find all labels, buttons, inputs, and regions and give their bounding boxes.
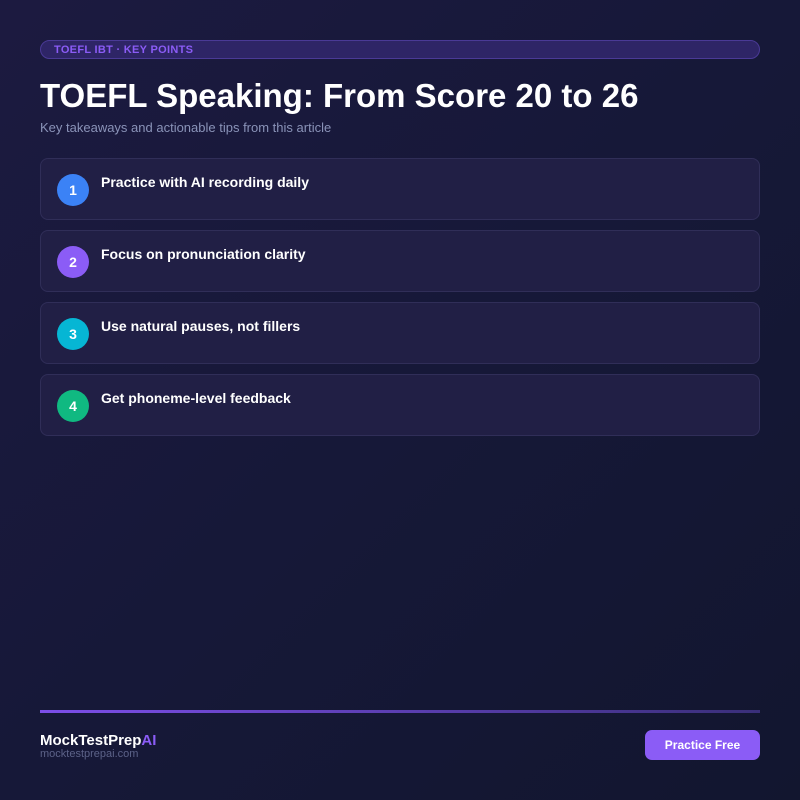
button: Practice Free [665,738,740,752]
badge: TOEFL IBT · KEY POINTS [54,44,193,56]
card 4 [40,374,760,436]
card 3: Use natural pauses, not fillers [101,318,300,334]
badge [40,40,760,59]
card 1: 1 [69,182,77,198]
card 3 [40,302,760,364]
card 4: 4 [69,398,77,414]
subtitle: Key takeaways and actionable tips from this article [40,120,331,135]
url: mocktestprepai.com [40,748,138,760]
card 3: 3 [69,326,77,342]
button [645,730,760,760]
card 2 [40,230,760,292]
brand: MockTestPrepAI [40,732,156,749]
card 4: Get phoneme-level feedback [101,390,291,406]
title: TOEFL Speaking: From Score 20 to 26 [40,77,638,114]
card 2: 2 [69,254,77,270]
card 1 [40,158,760,220]
card 1: Practice with AI recording daily [101,174,309,190]
card 2: Focus on pronunciation clarity [101,246,306,262]
